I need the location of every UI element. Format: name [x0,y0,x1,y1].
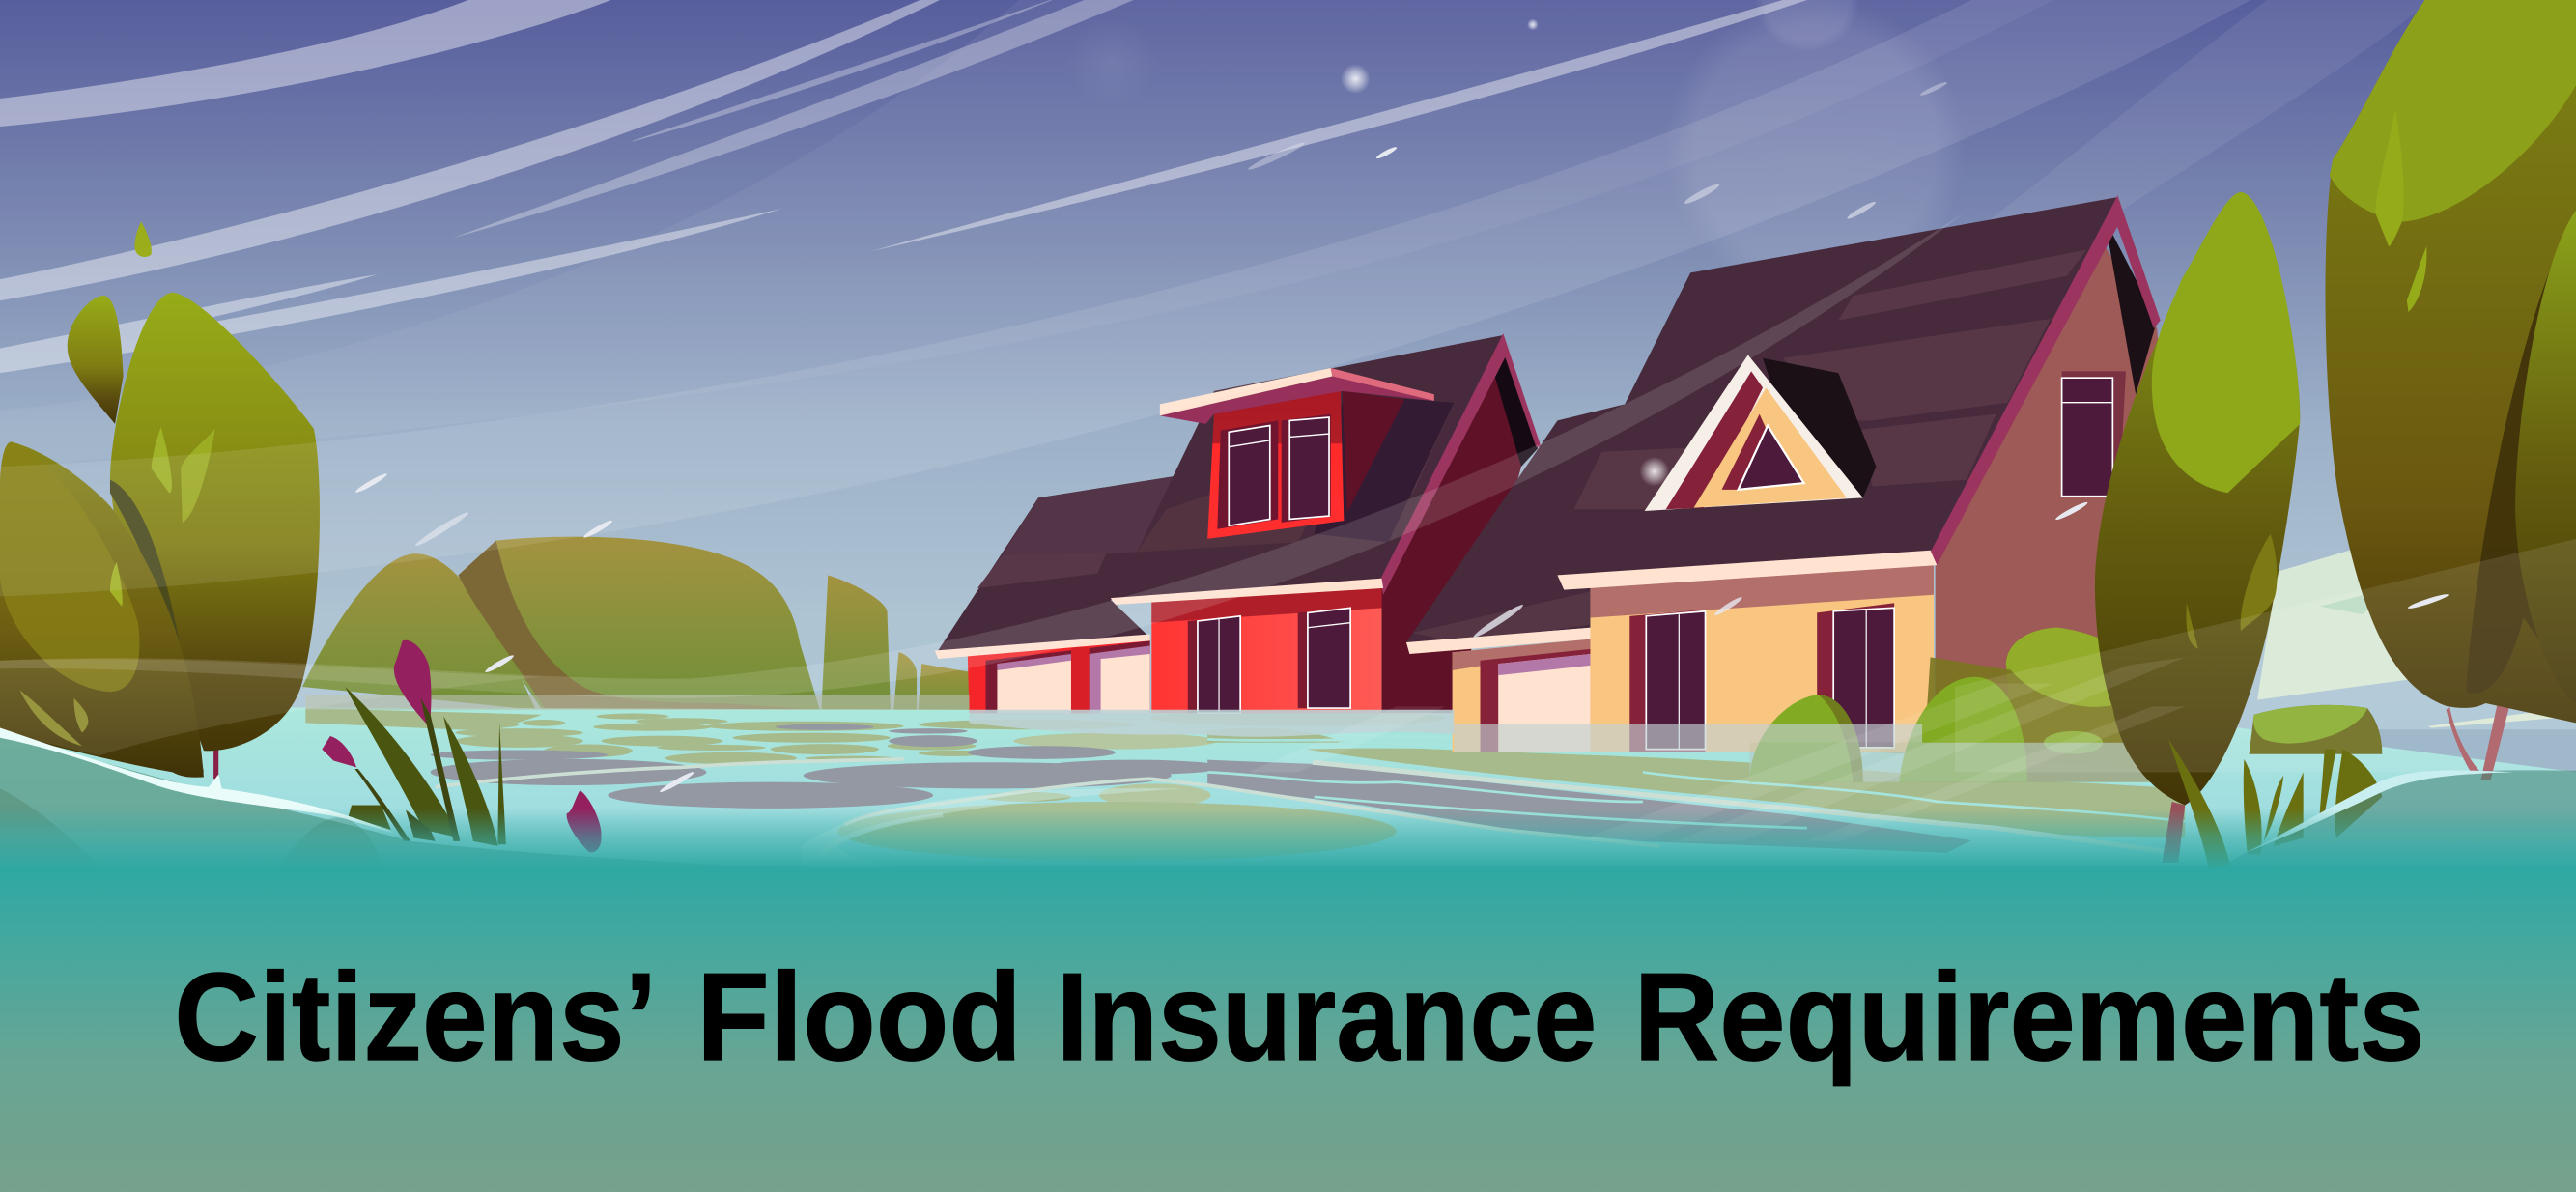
right trees [2095,0,2576,863]
left tree cluster [0,222,320,779]
title: Citizens’ [174,948,657,1087]
foreground reeds and flowers left [322,640,602,852]
garage [1453,639,1590,752]
roof dormer [1763,358,1876,497]
front wall [1590,565,1934,752]
eaves [1406,628,1590,654]
reed blades [345,687,460,837]
green floating patches [305,708,2185,837]
distant pale hills right [2218,476,2576,779]
surface fade to teal [0,809,2576,870]
front tree [2095,192,2300,805]
light leaf accents [151,427,172,493]
house: tan [1406,195,2185,752]
side window [2062,371,2126,497]
bokeh glows [1066,0,1967,299]
front tree highlight [2152,192,2300,493]
trunks [2480,624,2527,780]
front big leaf [0,442,204,778]
foreground wave right [2185,770,2576,887]
roof [1406,197,2117,642]
dormer [1315,394,1454,542]
flood water surface [0,706,2576,866]
rain droplets [354,80,2449,794]
broad wind bands over scene [0,0,2576,772]
wind streaks in sky [0,0,2431,467]
shadow stripe on crown [110,480,204,772]
cyan water net [1207,731,2185,828]
bush behind tree [2250,705,2382,754]
foreground reeds right [2168,739,2382,870]
gable trim [1380,333,1508,595]
grey reflections [431,724,1971,853]
house: red [935,333,1541,713]
side wall [1936,243,2185,743]
translucent flood line over buildings [305,695,2194,782]
title [174,948,2425,1087]
big right tree [2325,0,2576,723]
title: Requirements [1634,948,2425,1087]
pale water ripple band [436,759,2173,854]
falling leaf [134,222,152,257]
right green field [1306,749,2185,837]
big pale green patch [837,802,1397,861]
diagonal sun rays on water [1249,657,2185,841]
sky background [0,0,2576,772]
teal bottom panel [0,869,2576,1192]
foreground wave left [0,727,1183,903]
background hills and shrubs [302,537,970,710]
lower eave [935,635,1150,659]
tall leaf crown [110,293,320,751]
shrubs in front of houses [1749,628,2185,782]
flower buds [394,640,431,726]
upper eave [1111,579,1383,605]
front wall [1151,588,1381,713]
side wall [1381,347,1538,713]
title: Insurance [1057,948,1597,1087]
title: Flood [696,948,1022,1087]
garage wall [968,638,1150,713]
gable trim [1931,195,2121,565]
small upper leaf [68,296,124,424]
trunk [213,739,218,779]
roof [938,335,1503,651]
